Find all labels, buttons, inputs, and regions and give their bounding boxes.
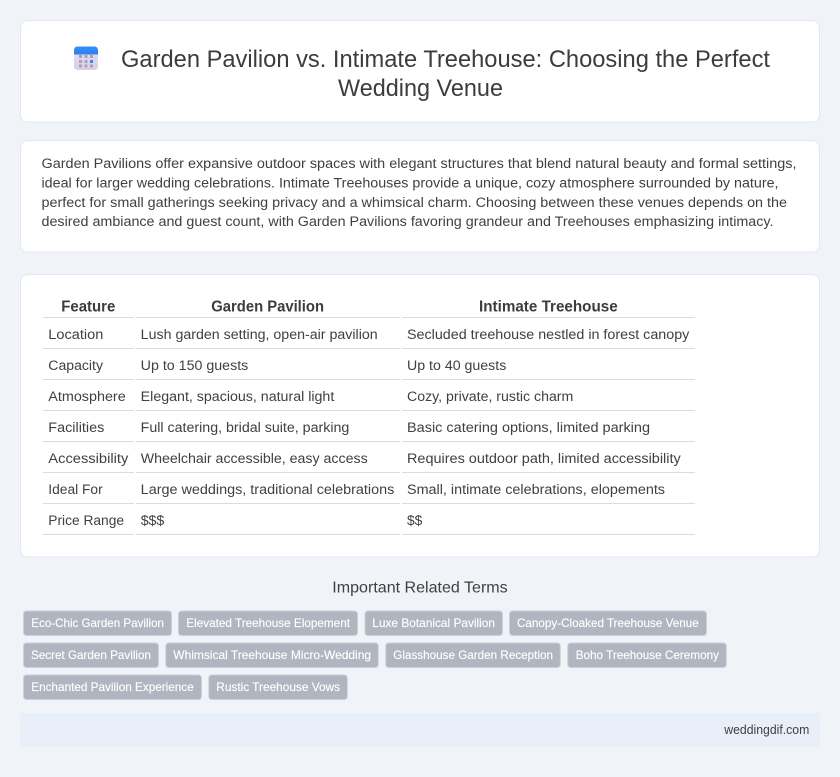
tag: Elevated Treehouse Elopement — [186, 616, 351, 630]
table row: atmosphere: Cozy, private, rustic charm — [407, 389, 573, 405]
tag — [386, 643, 560, 668]
table row: location: Lush garden setting, open-air pavilion — [141, 327, 378, 343]
tag: Canopy-Cloaked Treehouse Venue — [517, 616, 699, 630]
table row: ideal for: Large weddings, traditional celebrations — [141, 482, 394, 498]
icon: calendar — [74, 46, 98, 70]
table row: facilities — [43, 420, 695, 442]
tag — [24, 611, 172, 636]
tag — [166, 643, 378, 668]
intro text block: desired ambiance and guest count, with Garden Pavilions favoring grandeur and Treehouses emphasizing intimacy. — [42, 214, 774, 230]
table row: accessibility: Accessibility — [48, 451, 129, 467]
tag: Glasshouse Garden Reception — [393, 648, 553, 662]
table row: ideal for: Small, intimate celebrations, elopements — [407, 482, 665, 498]
tag — [24, 643, 158, 668]
panel: intro paragraph — [20, 140, 820, 252]
table row: atmosphere: Atmosphere — [48, 389, 126, 405]
intro text block: Garden Pavilions offer expansive outdoor spaces with elegant structures that blend natural beauty and formal settings, — [42, 156, 796, 172]
table header row: Feature — [61, 298, 116, 316]
panel: comparison table — [20, 274, 820, 557]
table row: price range: $$ — [407, 513, 422, 529]
title: Wedding Venue — [338, 75, 503, 102]
tag: Whimsical Treehouse Micro-Wedding — [173, 648, 371, 662]
table row: facilities: Full catering, bridal suite, parking — [141, 420, 349, 436]
table row: price range: $$$ — [141, 513, 164, 529]
table row: ideal for: Ideal For — [48, 482, 103, 498]
heading: related terms: Important Related Terms — [332, 580, 508, 597]
table header row — [43, 298, 695, 318]
tag: Luxe Botanical Pavilion — [372, 616, 495, 630]
title: Garden Pavilion vs. Intimate Treehouse: Choosing the Perfect — [121, 46, 770, 73]
tag — [365, 611, 502, 636]
table row: capacity: Up to 40 guests — [407, 358, 506, 374]
tag — [178, 611, 358, 636]
table row: price range — [43, 513, 695, 534]
table row: capacity — [43, 358, 695, 380]
intro text block — [42, 156, 796, 230]
tag: Eco-Chic Garden Pavilion — [31, 616, 164, 630]
table row: facilities: Basic catering options, limited parking — [407, 420, 650, 436]
intro text block: ideal for larger wedding celebrations. Intimate Treehouses provide a unique, cozy atmosphere surrounded by nature, — [42, 176, 778, 192]
tag: Rustic Treehouse Vows — [216, 680, 340, 694]
panel: title header — [20, 20, 820, 122]
table row: facilities: Facilities — [48, 420, 104, 436]
table header row: Garden Pavilion — [211, 298, 324, 316]
table row: accessibility — [43, 451, 695, 472]
related terms tags — [24, 611, 726, 700]
table header row: Intimate Treehouse — [479, 298, 618, 316]
table row: accessibility: Wheelchair accessible, easy access — [141, 451, 368, 467]
title — [121, 46, 770, 102]
footer bar — [20, 713, 820, 747]
table row: capacity: Up to 150 guests — [141, 358, 248, 374]
table row: location: Location — [48, 327, 103, 343]
table row: accessibility: Requires outdoor path, limited accessibility — [407, 451, 682, 467]
tag — [24, 675, 202, 700]
tag — [510, 611, 706, 636]
table row: location — [43, 327, 695, 348]
tag — [209, 675, 347, 700]
table row: location: Secluded treehouse nestled in forest canopy — [407, 327, 690, 343]
intro text block: perfect for small gatherings seeking privacy and a whimsical charm. Choosing between these venues depends on the — [42, 195, 787, 211]
tag: Enchanted Pavilion Experience — [31, 680, 194, 694]
table row: capacity: Capacity — [48, 358, 104, 374]
tag: Boho Treehouse Ceremony — [576, 648, 719, 662]
footer bar: weddingdif.com — [723, 723, 809, 737]
tag: Secret Garden Pavilion — [31, 648, 151, 662]
table row: atmosphere: Elegant, spacious, natural light — [141, 389, 334, 405]
table row: atmosphere — [43, 389, 695, 410]
table row: price range: Price Range — [48, 513, 124, 529]
tag — [568, 643, 726, 668]
table row: ideal for — [43, 482, 695, 504]
